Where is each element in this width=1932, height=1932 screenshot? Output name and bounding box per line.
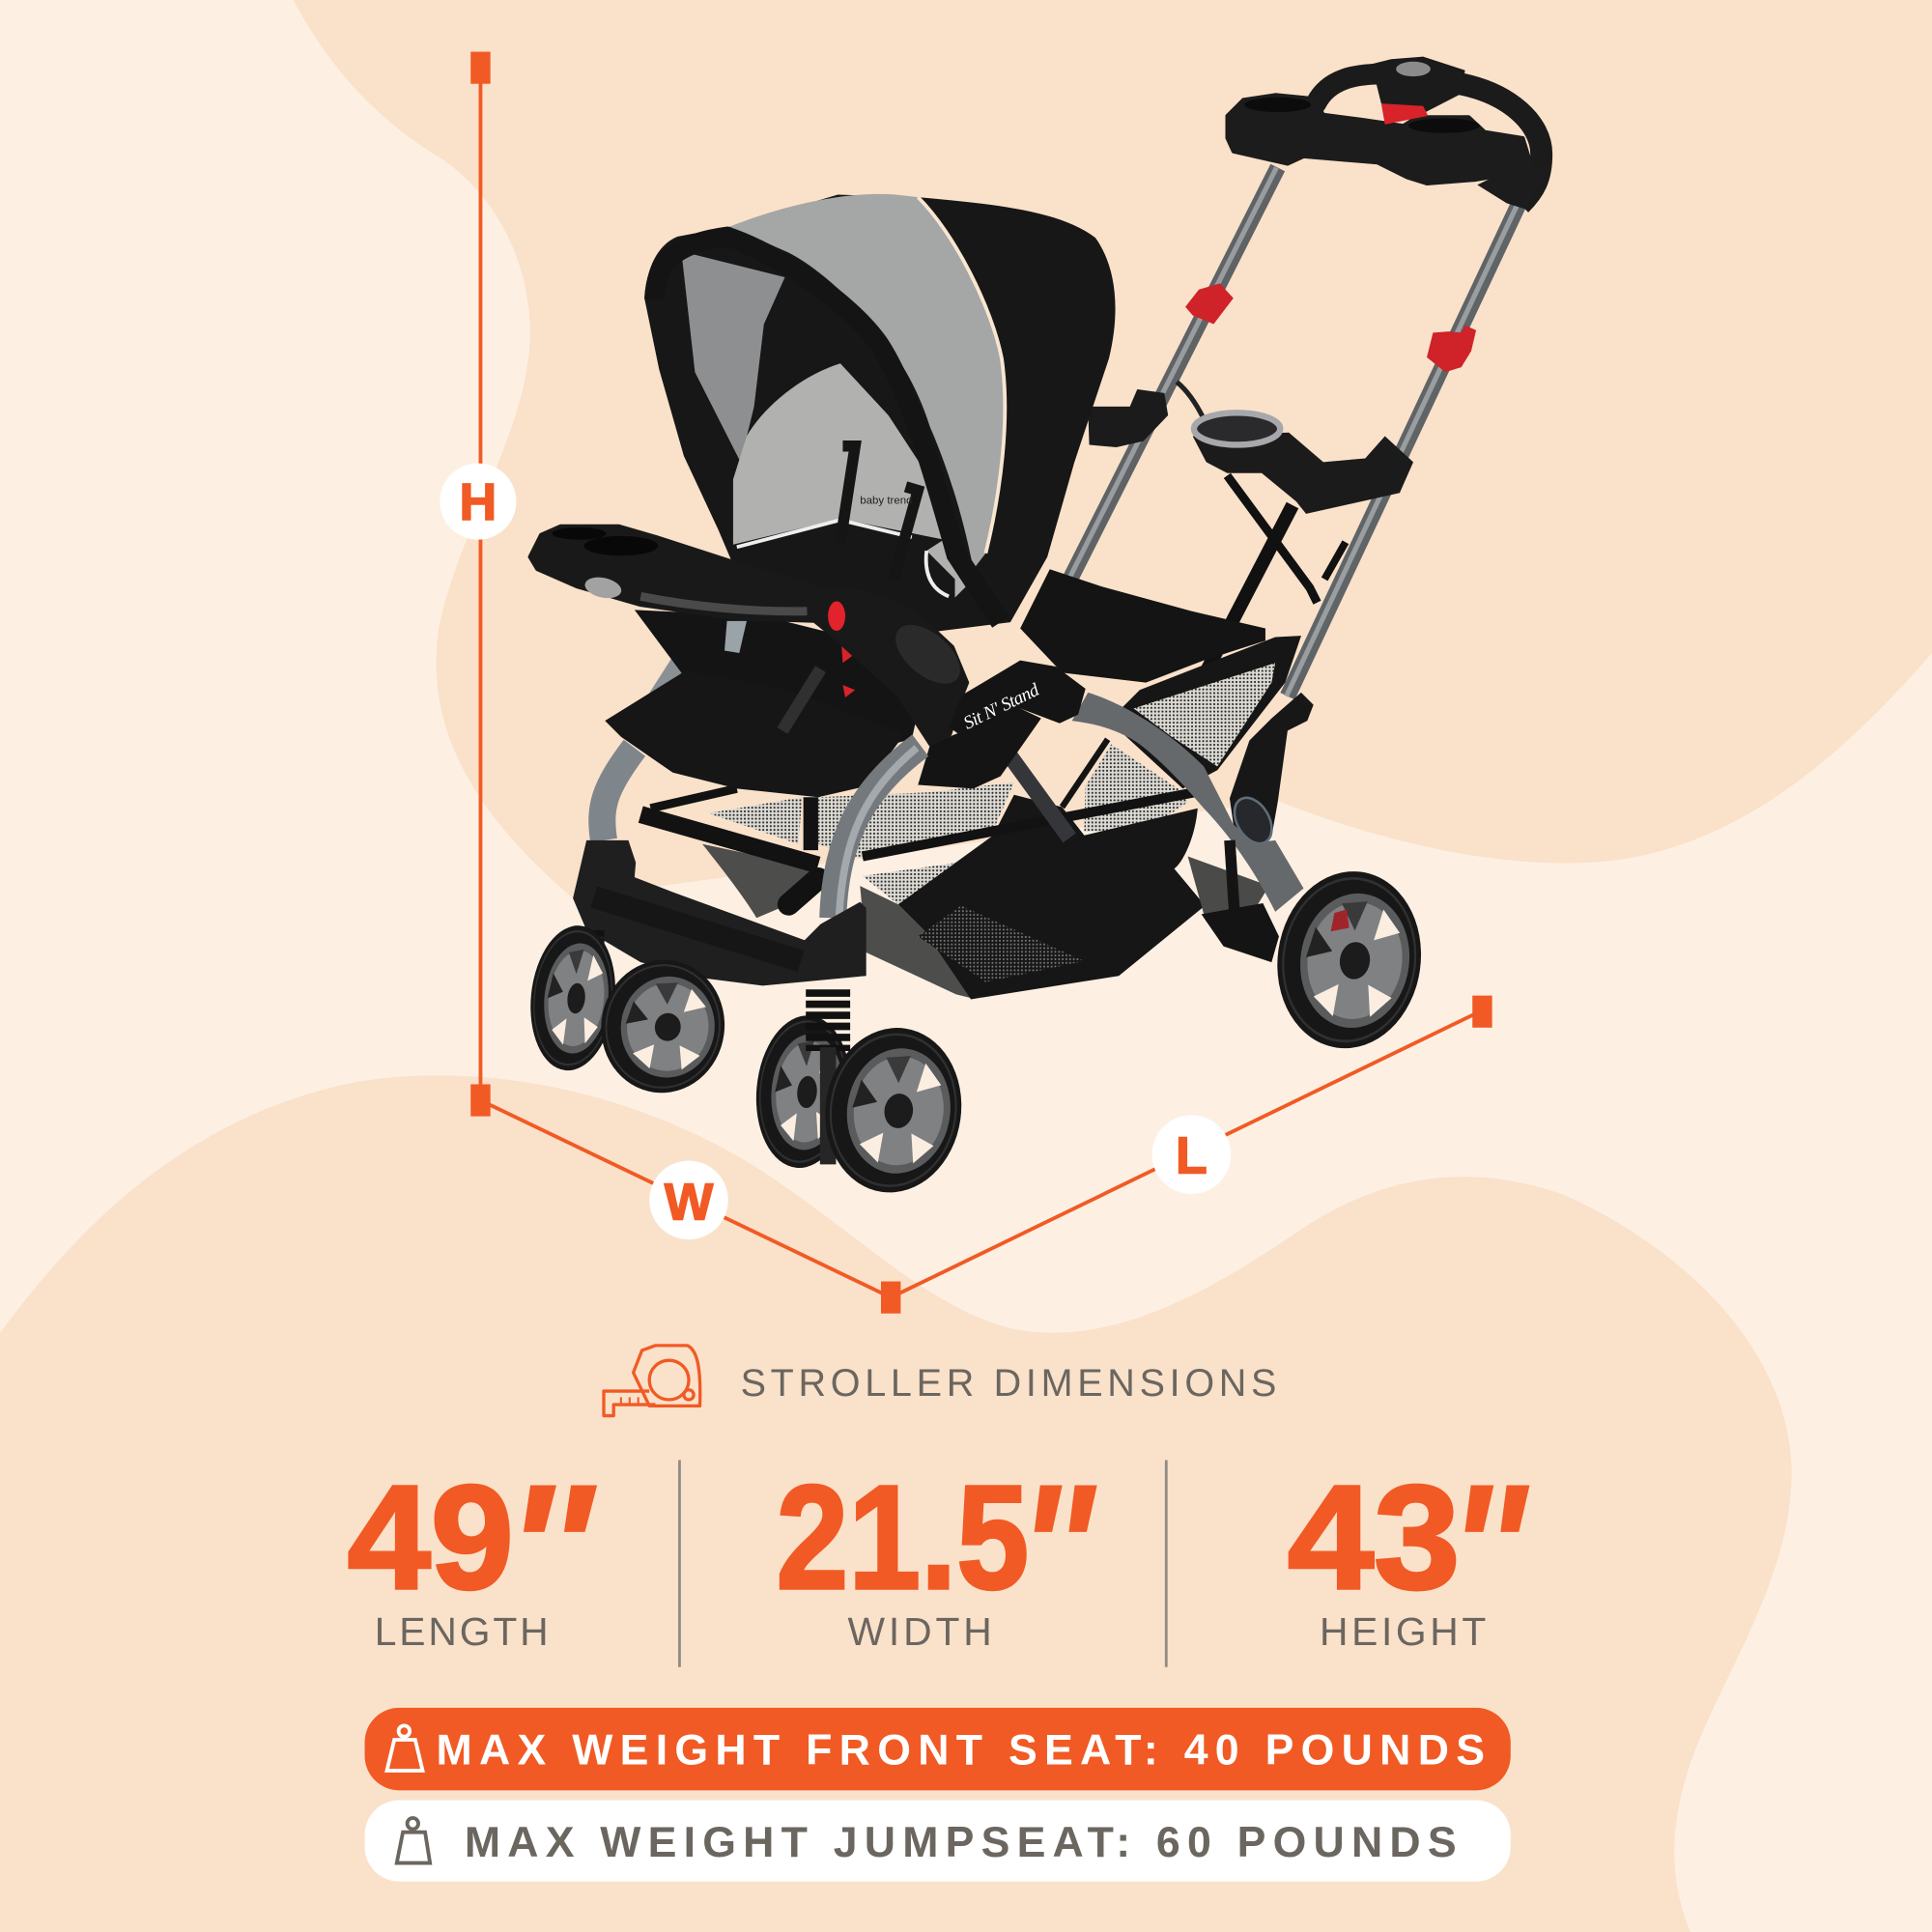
rear bracket [1230,693,1314,844]
label L [1152,1115,1231,1194]
under-tray seat [635,610,936,752]
front seat [605,670,904,797]
stat: length: 49 [348,1455,514,1620]
rear arc frame [1072,693,1303,912]
wheel hub lock [1331,909,1350,931]
handle bar and tray [1227,57,1545,210]
sit n stand plate [949,661,1086,739]
label W [649,1161,728,1239]
under-plate seat side [918,708,1041,788]
canopy: grey band [729,194,1005,569]
rear seat [1020,569,1265,683]
net support strap [1062,739,1108,807]
pill: front seat max weight [365,1708,1511,1790]
handle tubes [1065,167,1518,696]
pill: jumpseat max weight: MAX WEIGHT JUMPSEAT: 60 POUNDS [465,1819,1457,1866]
red clips [1185,283,1476,372]
lower rear net [1084,744,1188,832]
canopy: inner grey [681,251,784,462]
pill: jumpseat max weight [365,1801,1511,1882]
stat: width: WIDTH [848,1609,992,1654]
rear platform [1188,856,1279,962]
x-brace [1207,475,1346,671]
wheel: front left front [592,952,733,1101]
basket [702,795,1205,999]
label H: H [460,474,497,531]
wheel: front right front [814,1019,972,1202]
centre strut [1010,756,1069,838]
label H [440,464,516,540]
centre tube [833,746,921,918]
basket rails [640,788,1202,904]
stat: height: HEIGHT [1320,1609,1486,1654]
dimension line: height [470,52,491,1117]
left front spring [585,930,602,974]
upper rear net [1133,663,1275,766]
left net [708,797,802,844]
pill: front seat max weight: MAX WEIGHT FRONT SEAT: 40 POUNDS [437,1727,1485,1775]
left joint [1088,389,1168,447]
background blob: lower [0,1075,1792,1932]
stat: length: LENGTH [375,1609,549,1654]
stat: height: 43 [1288,1455,1460,1620]
canopy [644,194,1116,640]
stat: height [1288,1445,1530,1655]
dimension lines: width and length [480,996,1492,1314]
wheel: rear [1266,862,1433,1058]
canopy: rim [654,237,1001,622]
centre net [818,782,1014,860]
wheel: front left back [524,922,622,1075]
label L: L [1176,1127,1208,1184]
label W: W [665,1175,714,1232]
stroller [524,57,1545,1202]
stat: length [348,1445,597,1655]
right front spring and post [810,989,845,1164]
stat: width: " [1016,1445,1097,1655]
canopy: cream piping [918,197,1005,554]
front tray and arm [529,526,971,744]
seat belt [724,621,855,730]
wheel: front right back [750,1011,857,1172]
cup holder and bracket [1193,412,1413,514]
icon: weight [387,1725,423,1771]
stat: height: " [1446,1445,1530,1655]
rear logo badge [1227,791,1279,850]
divider [1165,1460,1167,1667]
divider [678,1460,681,1667]
strap [1177,382,1204,419]
rear net frame [1109,636,1301,788]
background blob: upper [294,0,1932,898]
icon: tape measure [604,1346,700,1416]
seat cushion [733,363,974,598]
left tube [602,748,635,840]
seat tube [657,663,679,697]
stat: width: 21.5 [777,1455,1029,1620]
seat logo: baby trend [860,496,913,507]
stat: length: " [502,1445,597,1655]
sit n stand plate: Sit N' Stand [960,680,1043,734]
heading: STROLLER DIMENSIONS [741,1362,1276,1405]
rear strut [1230,840,1236,934]
footboard [573,840,867,985]
icon: weight [397,1818,430,1863]
